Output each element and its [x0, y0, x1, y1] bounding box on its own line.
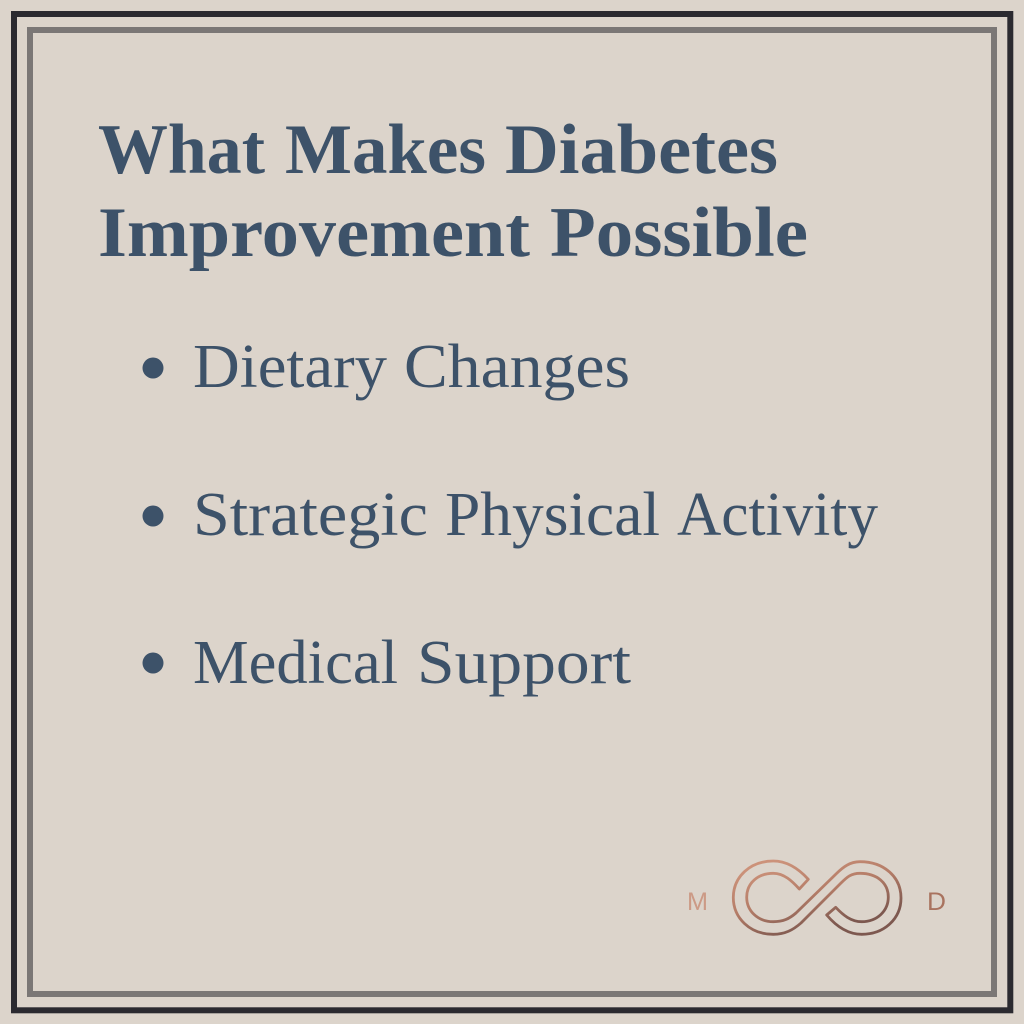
bullet: strategic physical activity: Activity	[677, 481, 878, 549]
logo infinity mark	[733, 861, 901, 934]
bullet: dietary changes	[142, 333, 630, 401]
title: Improvement	[98, 194, 530, 272]
bullet: medical support: Support	[417, 629, 631, 697]
bullet: strategic physical activity: Physical	[445, 481, 660, 549]
bullet list	[142, 333, 878, 697]
title: Diabetes	[505, 111, 778, 189]
logo: infinity MD	[687, 861, 946, 934]
bullet: strategic physical activity: Strategic	[193, 481, 428, 549]
title: Possible	[550, 194, 808, 272]
bullet: strategic physical activity	[142, 481, 878, 549]
logo letter D: D	[927, 888, 946, 916]
bullet: dietary changes: Dietary	[193, 333, 387, 401]
title: Makes	[285, 111, 486, 189]
bullet: dietary changes: Changes	[404, 333, 630, 401]
bullet: medical support	[142, 629, 631, 697]
logo letter M: M	[687, 888, 708, 916]
bullet: medical support: Medical	[193, 629, 398, 697]
title	[98, 111, 808, 272]
title: What	[98, 111, 265, 189]
